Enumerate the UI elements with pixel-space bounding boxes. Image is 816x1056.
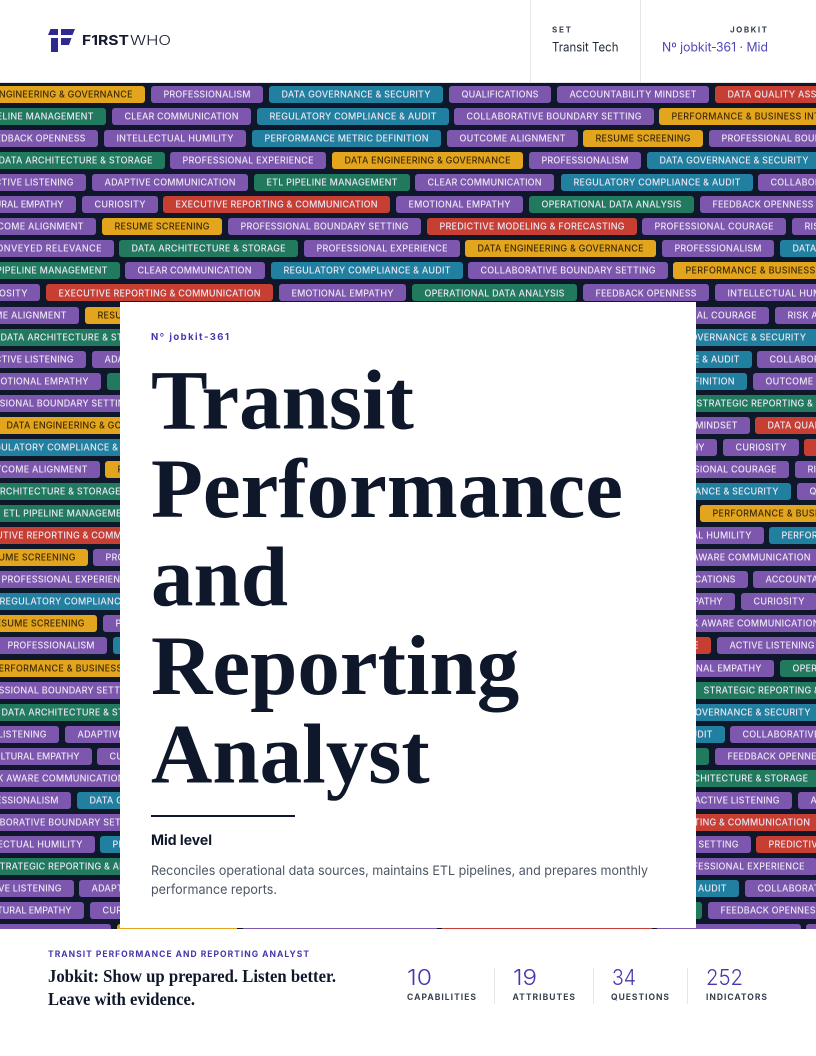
tag row 8: PROFESSIONALISM [674, 244, 762, 255]
header cell: set: SET [552, 24, 572, 34]
tag row 6: CURIOSITY [94, 200, 146, 211]
tag row 24 [0, 593, 816, 610]
tag row 29 [0, 704, 816, 721]
tag row 7: PROFESSIONAL COURAGE [654, 222, 774, 233]
tag row 33 [0, 792, 816, 809]
tag row 26: DATA QUALITY ASSURANCE [570, 641, 698, 652]
tag row 7: PROFESSIONAL BOUNDARY SETTING [240, 222, 409, 233]
tag row 29: DATA GOVERNANCE & SECURITY [662, 708, 811, 719]
tag row 28 [0, 682, 816, 699]
tag row 24: REGULATORY COMPLIANCE & AUDIT [0, 597, 167, 608]
tag row 34: EXECUTIVE REPORTING & COMMUNICATION [608, 818, 810, 829]
tag row 18 [0, 461, 816, 478]
tag row 9: COLLABORATIVE BOUNDARY SETTING [480, 266, 656, 277]
stat: questions: QUESTIONS [611, 993, 669, 1003]
tag row 20: ETL PIPELINE MANAGEMENT [4, 509, 135, 520]
header cell: jobkit: Nº jobkit‑361 · Mid [662, 40, 768, 56]
main title: Analyst [151, 708, 430, 802]
tag row 6: OPERATIONAL DATA ANALYSIS [542, 200, 682, 211]
tag row 6: EMOTIONAL EMPATHY [408, 200, 511, 211]
tag row 37 [0, 880, 816, 897]
tag row 3: PERFORMANCE METRIC DEFINITION [264, 134, 429, 145]
tag row 11: PROFESSIONAL COURAGE [638, 311, 756, 322]
main title [151, 354, 623, 802]
tag row 3: OUTCOME ALIGNMENT [460, 134, 566, 145]
tag row 39: RESUME SCREENING [130, 931, 225, 942]
tag row 8: PROFESSIONAL EXPERIENCE [316, 244, 448, 255]
tag row 37: ADAPTIVE COMMUNICATION [92, 884, 223, 895]
tag row 15 [0, 395, 816, 412]
tag row 10 [0, 284, 816, 301]
tag row 27: EMOTIONAL EMPATHY [660, 664, 762, 675]
tag row 21: INTELLECTUAL HUMILITY [634, 531, 752, 542]
stat: questions: 34 [612, 965, 636, 991]
tag row 12: DATA ARCHITECTURE & STORAGE [0, 333, 154, 344]
tag row 10: EMOTIONAL EMPATHY [292, 289, 394, 300]
tag row 3: RESUME SCREENING [596, 134, 691, 145]
tag row 23: PROFESSIONAL EXPERIENCE [2, 575, 132, 586]
tag row 17 [0, 439, 816, 456]
footer [48, 950, 767, 1009]
tag row 25: RISK AWARE COMMUNICATION [678, 619, 816, 630]
tag row 21 [0, 527, 816, 544]
stat: capabilities [407, 965, 476, 1003]
tag row 39 [0, 924, 816, 929]
tag row 36: PROFESSIONAL EXPERIENCE [674, 862, 804, 873]
tag row 25 [0, 615, 816, 632]
tag row 4: DATA GOVERNANCE & SECURITY [660, 156, 809, 167]
tag row 14 [0, 373, 816, 390]
tag row 36 [0, 858, 816, 875]
tag row 18: RESUME SCREENING [118, 465, 213, 476]
tag row 31: CURIOSITY [110, 752, 161, 763]
tag row 5: CLEAR COMMUNICATION [428, 178, 542, 189]
tag row 35: PROFESSIONAL BOUNDARY SETTING [570, 840, 739, 851]
tag row 6 [0, 196, 816, 213]
tag row 17: CULTURAL EMPATHY [612, 443, 705, 454]
tag row 29: DATA ARCHITECTURE & STORAGE [2, 708, 156, 719]
tag row 33: DATA GOVERNANCE & SECURITY [90, 796, 239, 807]
stat: indicators: 252 [706, 965, 743, 991]
tag row 9: CLEAR COMMUNICATION [138, 266, 252, 277]
tag row 26: PROFESSIONALISM [8, 641, 94, 652]
tag row 25: PROFESSIONAL BOUNDARY SETTING [116, 619, 284, 630]
logo: FirstWho [48, 29, 171, 52]
footer tagline: Jobkit: Show up prepared. Listen better. [48, 966, 336, 986]
tag row 10: OPERATIONAL DATA ANALYSIS [424, 289, 565, 300]
tag row 16: DATA ENGINEERING & GOVERNANCE [6, 421, 172, 432]
stat: indicators [706, 965, 767, 1003]
tag row 22 [0, 549, 816, 566]
title card panel [120, 302, 696, 928]
tag row 6: FEEDBACK OPENNESS [712, 200, 814, 211]
tag row 31: OPERATIONAL DATA ANALYSIS [556, 752, 697, 763]
logo: FirstWho: F1RST [82, 33, 129, 49]
tag row 6: EXECUTIVE REPORTING & COMMUNICATION [176, 200, 378, 211]
tag row 10: FEEDBACK OPENNESS [596, 289, 697, 300]
tag row 24: CULTURAL EMPATHY [630, 597, 723, 608]
tag row 4: PROFESSIONAL EXPERIENCE [182, 156, 314, 167]
main title: Reporting [151, 619, 519, 713]
header cell: set [552, 24, 618, 56]
tag row 13 [0, 351, 816, 368]
tag row 26: ACTIVE LISTENING [730, 641, 815, 652]
tag row 20 [0, 505, 816, 522]
tag row 35 [0, 836, 816, 853]
tag row 17: CURIOSITY [736, 443, 787, 454]
tag row 23: QUALIFICATIONS [658, 575, 736, 586]
tag row 35: PERFORMANCE METRIC DEFINITION [112, 840, 277, 851]
tag row 8: DATA ENGINEERING & GOVERNANCE [478, 244, 644, 255]
tag row 26: DATA GOVERNANCE & SECURITY [126, 641, 275, 652]
tag row 11: RESUME SCREENING [98, 311, 193, 322]
tag row 2: COLLABORATIVE BOUNDARY SETTING [466, 112, 642, 123]
tag row 1 [0, 86, 816, 103]
stat: questions [611, 965, 669, 1003]
tag row 38: OPERATIONAL DATA ANALYSIS [550, 906, 690, 917]
tag row 16 [0, 417, 816, 434]
tag row 37: REGULATORY COMPLIANCE & AUDIT [560, 884, 727, 895]
footer role label: TRANSIT PERFORMANCE AND REPORTING ANALYST [48, 950, 309, 960]
tag row 30: ADAPTIVE COMMUNICATION [78, 730, 209, 741]
tag row 23 [0, 571, 816, 588]
tag row 22: PROFESSIONAL BOUNDARY SETTING [106, 553, 274, 564]
tag row 2 [0, 108, 816, 125]
tag row 33: ACTIVE LISTENING [694, 796, 780, 807]
tag row 18: PROFESSIONAL COURAGE [658, 465, 776, 476]
header cell: set: Transit Tech [552, 40, 618, 56]
tag row 8: DATA ARCHITECTURE & STORAGE [132, 244, 286, 255]
title rule [151, 815, 295, 817]
footer tagline [48, 966, 336, 1009]
tag row 1: DATA GOVERNANCE & SECURITY [282, 90, 431, 101]
tag row 2: CLEAR COMMUNICATION [124, 112, 239, 123]
footer tagline: Leave with evidence. [48, 989, 195, 1009]
tag row 32: DATA ARCHITECTURE & STORAGE [654, 774, 808, 785]
tag row 7: RESUME SCREENING [114, 222, 210, 233]
tag row 38 [0, 902, 816, 919]
tag row 1: ACCOUNTABILITY MINDSET [570, 90, 697, 101]
tag row 38: CURIOSITY [102, 906, 154, 917]
tag row 12: DATA GOVERNANCE & SECURITY [657, 333, 807, 344]
tag row 3 [0, 130, 816, 147]
tag row 7 [0, 218, 816, 235]
tag row 1: QUALIFICATIONS [462, 90, 539, 101]
stat: attributes: ATTRIBUTES [512, 993, 575, 1003]
tag row 4: DATA ARCHITECTURE & STORAGE [0, 156, 152, 167]
stat: attributes: 19 [513, 965, 537, 991]
tag row 39: PROFESSIONAL BOUNDARY SETTING [256, 931, 424, 942]
tag row 30: REGULATORY COMPLIANCE & AUDIT [546, 730, 713, 741]
tag row 34 [0, 814, 816, 831]
tag row 14: PERFORMANCE METRIC DEFINITION [570, 377, 735, 388]
tag row 19 [0, 483, 816, 500]
tag row 2: REGULATORY COMPLIANCE & AUDIT [270, 112, 437, 123]
tag row 13: ADAPTIVE COMMUNICATION [104, 355, 236, 366]
tag row 19: DATA GOVERNANCE & SECURITY [630, 487, 779, 498]
tag row 9 [0, 262, 816, 279]
tag row 7: PREDICTIVE MODELING & FORECASTING [440, 222, 625, 233]
tag row 16: ACCOUNTABILITY MINDSET [610, 421, 738, 432]
tag row 14: OPERATIONAL DATA ANALYSIS [120, 377, 260, 388]
tag row 4 [0, 152, 816, 169]
card eyebrow: Nº jobkit‑361 [151, 332, 229, 343]
description: performance reports. [151, 882, 277, 898]
tag row 5: ADAPTIVE COMMUNICATION [104, 178, 236, 189]
tag row 24: CURIOSITY [754, 597, 805, 608]
tag row 5 [0, 174, 816, 191]
header cell: jobkit [662, 24, 768, 56]
tag row 5: REGULATORY COMPLIANCE & AUDIT [574, 178, 741, 189]
tag row 4: PROFESSIONALISM [542, 156, 628, 167]
tag row 39: PROFESSIONAL COURAGE [670, 931, 788, 942]
tag row 1: PROFESSIONALISM [164, 90, 250, 101]
tag row 22: RISK AWARE COMMUNICATION [668, 553, 811, 564]
tag row 10: EXECUTIVE REPORTING & COMMUNICATION [58, 289, 261, 300]
tag row 13: REGULATORY COMPLIANCE & AUDIT [572, 355, 740, 366]
tag row 12 [0, 329, 816, 346]
tag row 27 [0, 660, 816, 677]
main title: Performance [151, 442, 623, 536]
level: Mid level [151, 832, 212, 849]
header cell: jobkit: JOBKIT [730, 24, 768, 34]
tag row 39: PREDICTIVE MODELING & FORECASTING [454, 931, 640, 942]
header bar [0, 0, 816, 83]
stat: indicators: INDICATORS [706, 993, 767, 1003]
tag row 5: ETL PIPELINE MANAGEMENT [266, 178, 398, 189]
tag row 31 [0, 748, 816, 765]
tag row 32 [0, 770, 816, 787]
stat: capabilities: CAPABILITIES [407, 993, 476, 1003]
description [151, 863, 648, 898]
tag row 3: INTELLECTUAL HUMILITY [116, 134, 234, 145]
stat: capabilities: 10 [407, 965, 432, 991]
main title: and [151, 530, 288, 624]
logo: FirstWho: WHO [130, 33, 171, 49]
tag row 30 [0, 726, 816, 743]
stat: attributes [512, 965, 575, 1003]
description: Reconciles operational data sources, maintains ETL pipelines, and prepares monthly [151, 863, 648, 879]
tag row 4: DATA ENGINEERING & GOVERNANCE [344, 156, 510, 167]
tag row 26 [0, 637, 816, 654]
tag row 8 [0, 240, 816, 257]
tag row 11 [0, 307, 816, 324]
tag row 9: REGULATORY COMPLIANCE & AUDIT [284, 266, 451, 277]
main title: Transit [151, 354, 414, 448]
